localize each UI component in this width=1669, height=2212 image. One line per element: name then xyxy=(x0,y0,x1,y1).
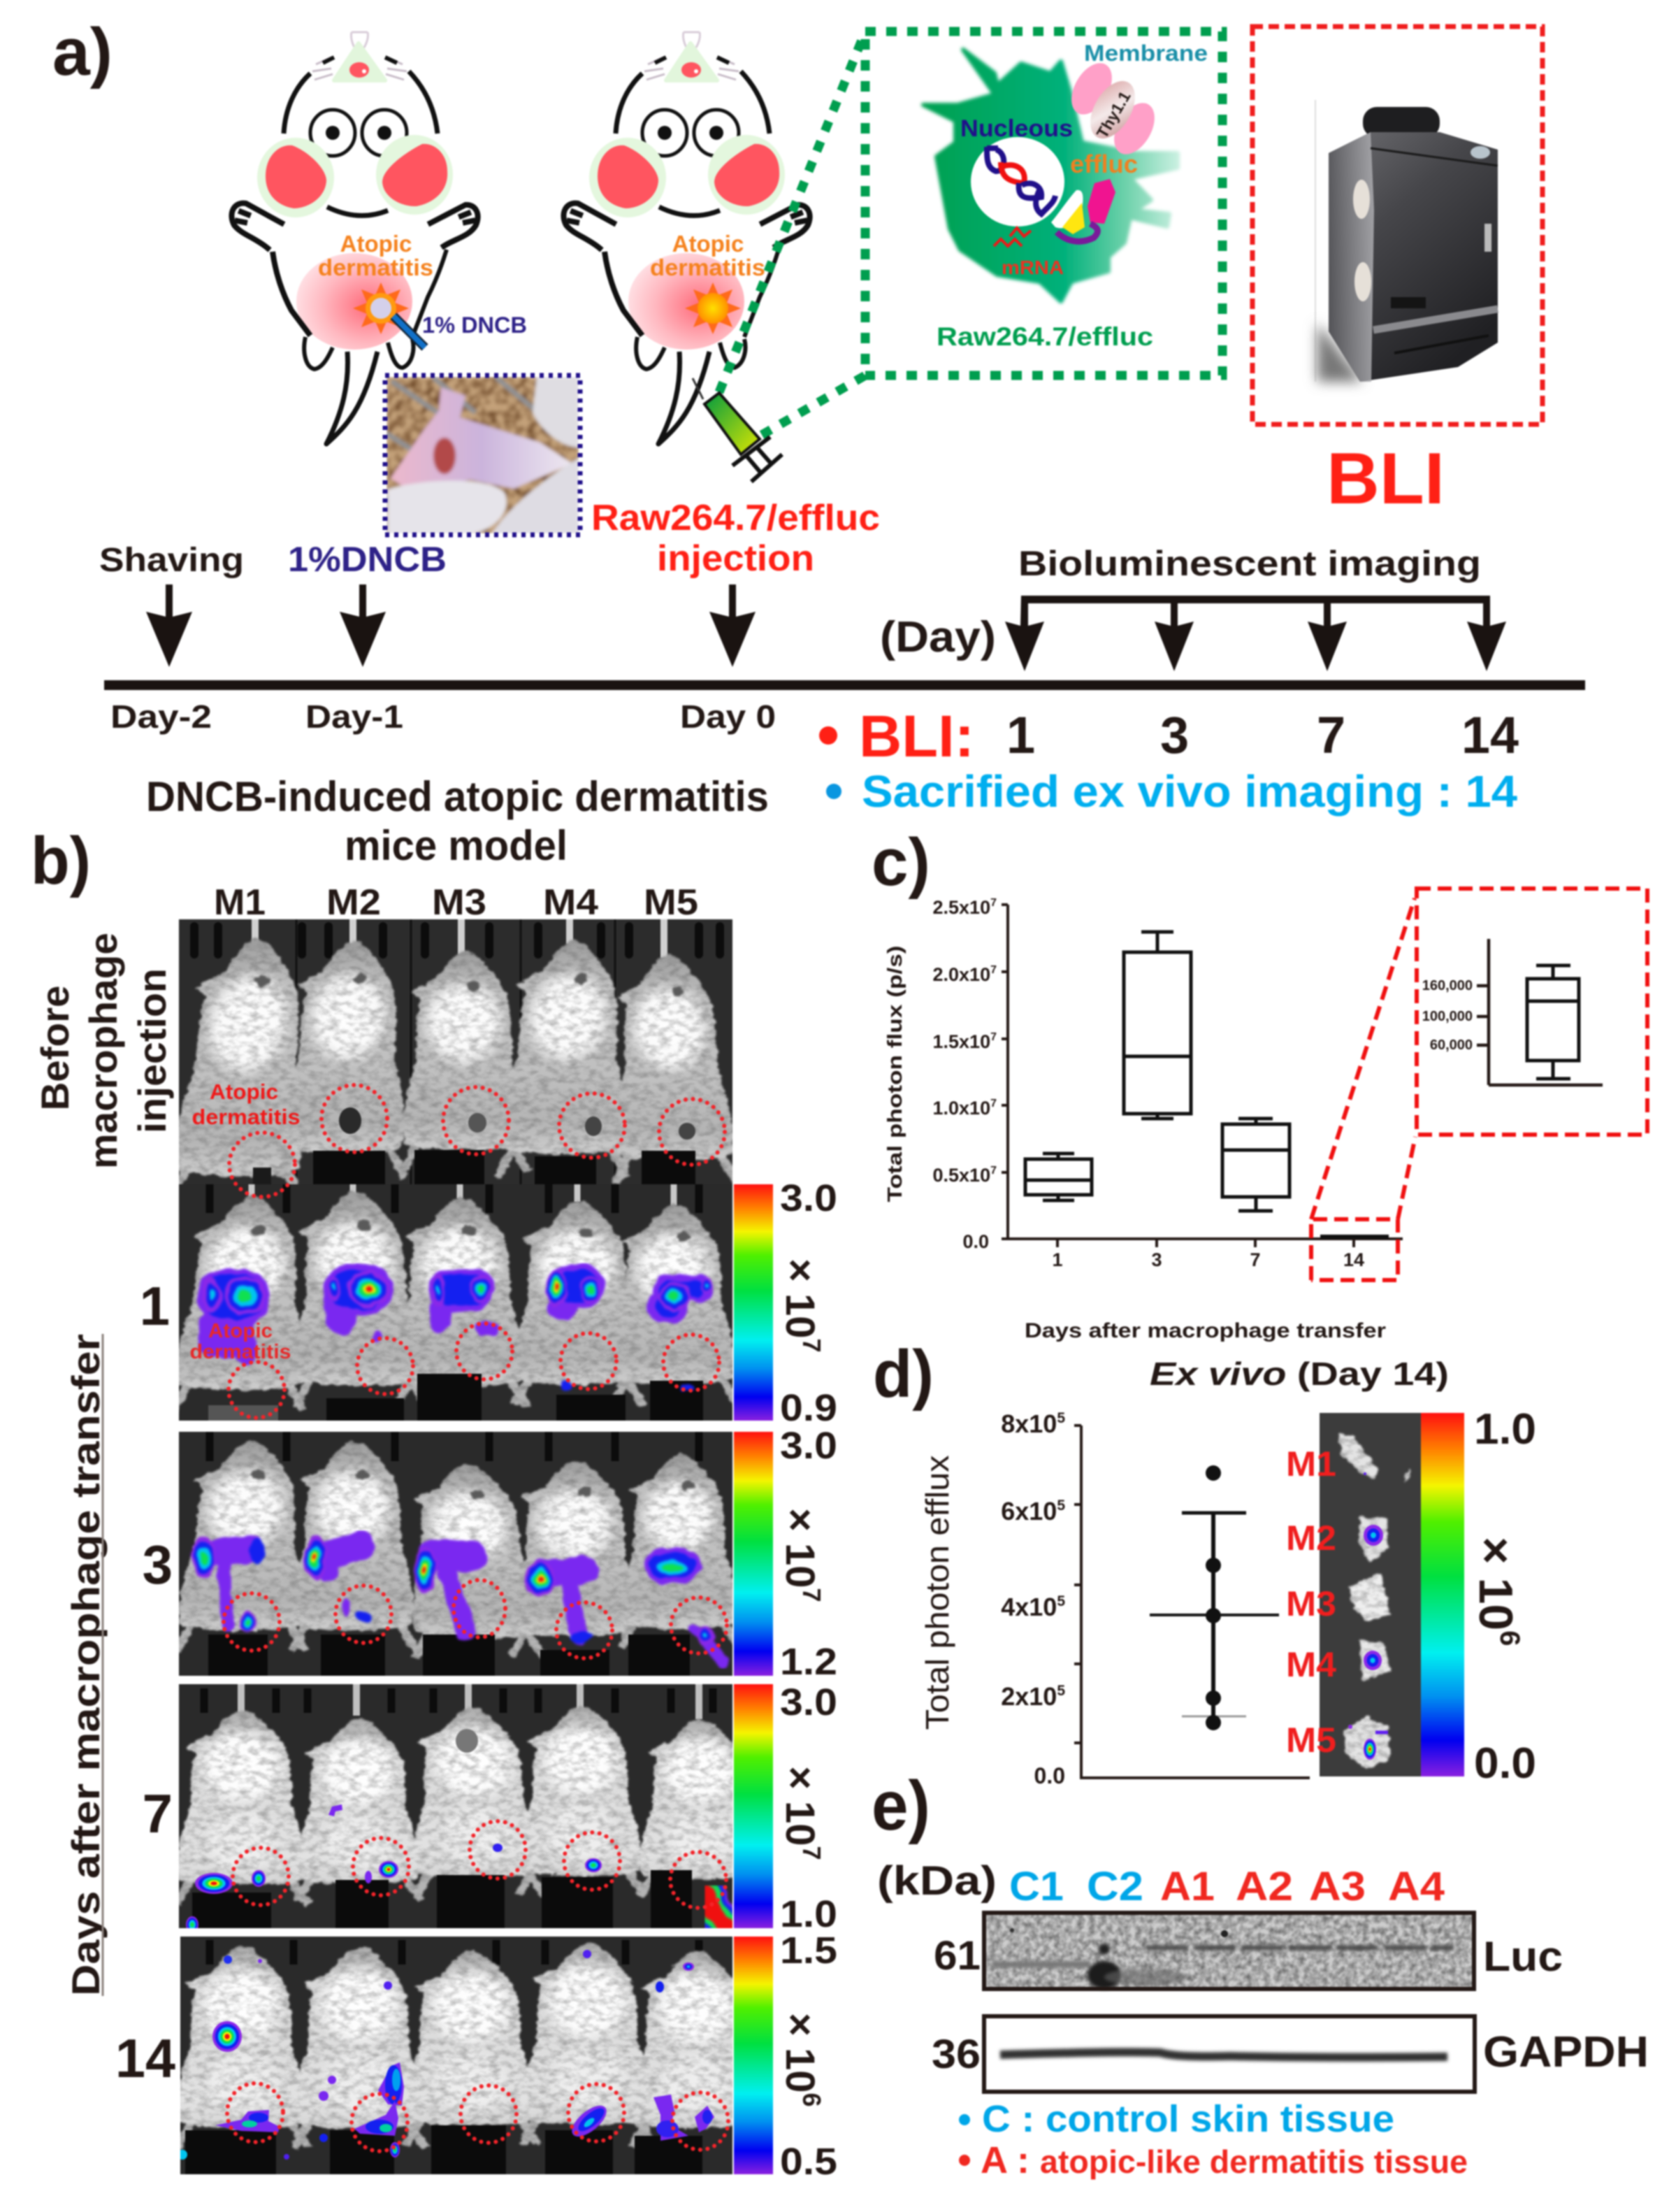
panel: BLI imaging instrument xyxy=(1252,27,1542,424)
y tick labels: 2.5x10 xyxy=(932,897,990,918)
row number labels: 7 xyxy=(143,1783,173,1844)
row label: before macrophage injection xyxy=(33,933,174,1169)
panel label e: e) xyxy=(872,1767,930,1845)
day labels: Day-2 xyxy=(110,698,212,735)
heat signal M5 xyxy=(656,1560,723,1662)
lesion annotations on M1: Atopic xyxy=(208,1320,273,1342)
heat signal M3 xyxy=(431,1274,493,1329)
heat signal M1 xyxy=(178,1955,289,2160)
image row: day 3 xyxy=(176,1432,739,1676)
ex vivo tissue image xyxy=(1320,1413,1421,1776)
row number labels xyxy=(115,1275,175,2089)
inset box plot xyxy=(1422,939,1603,1085)
title second line: mice model xyxy=(345,822,568,869)
lane labels: C2 xyxy=(1087,1864,1143,1909)
legend: atopic: A : xyxy=(981,2139,1029,2181)
cell body xyxy=(923,50,1178,301)
heat signal M2 xyxy=(328,1804,398,1883)
box day 3 xyxy=(1124,932,1191,1119)
BLI schedule: BLI: xyxy=(859,703,974,769)
arrow: shaving xyxy=(146,584,192,667)
colour scale: day 3 xyxy=(734,1425,837,1683)
BLI schedule: 1 xyxy=(1006,706,1035,764)
y tick labels: 1.0x10 xyxy=(932,1098,990,1119)
y tick labels: 5 xyxy=(1057,1498,1065,1514)
unit label: (kDa) xyxy=(877,1858,997,1904)
colour scale: day 1: 7 xyxy=(797,1338,826,1353)
y tick labels: 0.0 xyxy=(1034,1763,1065,1788)
image row: day 14 xyxy=(177,1937,761,2174)
row label: before macrophage injection: Before xyxy=(33,985,77,1111)
box plots xyxy=(1025,932,1389,1237)
colour scale: day 3: 3.0 xyxy=(780,1425,837,1467)
x tick labels: 7 xyxy=(1250,1249,1261,1270)
y tick labels: 2.0x10 xyxy=(932,964,990,985)
colour scale xyxy=(1421,1405,1536,1788)
cartoon mouse with macrophage injection xyxy=(563,32,810,444)
label: shaving: Shaving xyxy=(99,542,244,579)
DNA helix xyxy=(987,147,1055,214)
arrow: day 0 xyxy=(709,584,756,667)
bracket arrows for imaging days xyxy=(1005,596,1506,671)
heat signal M4 xyxy=(585,1858,602,1872)
panel b: in vivo bioluminescence xyxy=(31,773,837,2183)
lesion label second line: dermatitis xyxy=(318,254,433,280)
timeline bar xyxy=(104,680,1585,690)
heat signal M4 xyxy=(567,1950,612,2142)
inset box plot: 60,000 xyxy=(1430,1037,1473,1053)
heat signal M5 xyxy=(659,1278,714,1388)
panel a: experimental scheme xyxy=(52,15,1585,817)
heat signal M1 xyxy=(186,1870,266,1933)
injection label: Raw264.7/effluc xyxy=(591,498,880,538)
injection label xyxy=(591,498,880,579)
timeline xyxy=(99,540,1585,817)
mRNA squiggle xyxy=(994,228,1031,246)
y tick labels: 7 xyxy=(990,1031,997,1043)
arrow: DNCB xyxy=(340,584,386,667)
BLI schedule: 3 xyxy=(1160,706,1189,764)
box day 14 xyxy=(1320,1235,1389,1239)
lesion label: Atopic xyxy=(672,231,744,257)
membrane proteins xyxy=(1063,56,1163,161)
kDa markers: 61 xyxy=(934,1933,981,1978)
heat signal M4 xyxy=(525,1560,593,1643)
axes xyxy=(1074,1425,1310,1778)
colour scale: day 7 xyxy=(734,1681,837,1935)
y tick labels: 0.0 xyxy=(962,1231,989,1252)
cell caption: Raw264.7/effluc xyxy=(937,322,1153,351)
title: DNCB-induced atopic dermatitis xyxy=(146,773,769,820)
colour scale: 0.0 xyxy=(1474,1739,1536,1788)
label: 1% DNCB: 1%DNCB xyxy=(288,540,447,579)
lesion markers: dotted red circles xyxy=(224,1085,728,2151)
injection label: injection xyxy=(657,538,814,579)
M labels xyxy=(1286,1444,1336,1760)
lane labels xyxy=(1009,1864,1445,1909)
panel c: total photon flux box plot xyxy=(872,825,1647,1342)
protein label GAPDH: GAPDH xyxy=(1483,2028,1649,2076)
image row: day 1 xyxy=(172,1184,737,1421)
axis label: days after macrophage transfer: Days after macrophage transfer xyxy=(64,1334,108,1996)
heat signal M1 xyxy=(202,1277,266,1355)
panel e: western blot xyxy=(872,1767,1649,2181)
x tick labels xyxy=(1052,1249,1364,1270)
GAPDH blot xyxy=(984,2016,1475,2092)
lane labels: A1 xyxy=(1160,1864,1215,1909)
heat signal M3 xyxy=(413,1548,472,1632)
y tick labels: 1.5x10 xyxy=(932,1031,990,1052)
colour scale: day 3: 7 xyxy=(797,1588,826,1602)
dot plot xyxy=(1150,1465,1279,1730)
panel label d: d) xyxy=(873,1337,934,1412)
y tick labels: 5 xyxy=(1057,1410,1065,1426)
lane labels: C1 xyxy=(1009,1864,1064,1909)
heat signal M2 xyxy=(303,1537,371,1621)
x tick labels: 3 xyxy=(1151,1249,1162,1270)
y tick labels: 5 xyxy=(1057,1683,1065,1699)
label effluc: effluc xyxy=(1070,150,1138,178)
y tick labels: 5 xyxy=(1057,1593,1065,1609)
row number labels: 1 xyxy=(140,1275,170,1337)
day label: Day-1 xyxy=(305,698,403,735)
panel d: ex vivo xyxy=(873,1337,1536,1788)
row label: before macrophage injection: injection xyxy=(130,968,174,1133)
lesion annotations on M1: dermatitis xyxy=(192,1105,301,1129)
colour scale: day 14: 0.5 xyxy=(780,2141,837,2183)
inset box plot: 160,000 xyxy=(1422,978,1473,993)
colour scale: day 1 xyxy=(734,1177,837,1429)
lane labels: A4 xyxy=(1388,1864,1445,1909)
DNCB label: 1% DNCB xyxy=(422,313,527,338)
y tick labels: 2x10 xyxy=(1001,1682,1057,1711)
effluc protein xyxy=(1051,179,1115,241)
BLI schedule: 7 xyxy=(1317,706,1345,764)
inset box plot: 100,000 xyxy=(1422,1009,1473,1024)
y tick labels: 4x10 xyxy=(1001,1593,1057,1621)
lane labels: A3 xyxy=(1309,1864,1366,1909)
image row: day 7 xyxy=(177,1684,760,1933)
legend: control: C : control skin tissue xyxy=(982,2098,1394,2140)
lesion label: Atopic xyxy=(340,231,412,257)
panel label c: c) xyxy=(872,825,930,900)
Thy1.1 label: Thy1.1 xyxy=(1093,88,1134,141)
cartoon mouse with DNCB application xyxy=(231,32,527,444)
M labels: M3 xyxy=(1286,1584,1336,1623)
y tick labels: 7 xyxy=(990,897,997,909)
heat signal M2 xyxy=(319,1981,404,2157)
BLI schedule: 14 xyxy=(1461,706,1519,764)
legend: atopic: atopic-like dermatitis tissue xyxy=(1040,2143,1468,2180)
M labels: M4 xyxy=(1286,1645,1336,1684)
colour scale: day 14: 6 xyxy=(797,2093,826,2107)
heat signal M2 xyxy=(328,1270,390,1337)
colour scale: day 14 xyxy=(734,1930,837,2183)
x tick labels: 14 xyxy=(1343,1249,1364,1270)
lesion annotations on M1 xyxy=(190,1079,301,1363)
x axis title: Days after macrophage transfer xyxy=(1025,1319,1386,1342)
panel: macrophage cell xyxy=(865,31,1222,375)
y tick labels: 6x10 xyxy=(1001,1497,1057,1525)
label: day axis: (Day) xyxy=(880,613,996,661)
colour scale: 6 xyxy=(1494,1630,1525,1646)
colour scale: day 7: 1.0 xyxy=(780,1893,837,1935)
label: bioluminescent imaging: Bioluminescent imaging xyxy=(1018,544,1481,583)
row label: before macrophage injection: macrophage xyxy=(81,933,125,1169)
M labels: M2 xyxy=(1286,1518,1336,1558)
colour scale: day 3: × 10 xyxy=(777,1508,823,1588)
row number labels: 3 xyxy=(143,1534,173,1595)
label mRNA: mRNA xyxy=(1002,257,1064,278)
mouse column labels: M1 xyxy=(214,882,266,923)
heat signal M5 xyxy=(653,1962,714,2141)
axes xyxy=(1002,905,1403,1247)
lane labels: A2 xyxy=(1236,1864,1293,1909)
panel label b: b) xyxy=(31,824,91,898)
heat signal M3 xyxy=(493,1844,503,1852)
lesion annotations on M1: dermatitis xyxy=(190,1341,291,1363)
label Membrane: Membrane xyxy=(1084,41,1208,66)
colour scale: day 7: 7 xyxy=(797,1846,826,1860)
colour scale: day 7: × 10 xyxy=(777,1766,823,1846)
colour scale: day 14: × 10 xyxy=(777,2013,823,2093)
colour scale: day 3: 1.2 xyxy=(780,1641,837,1683)
M labels: M5 xyxy=(1286,1721,1336,1760)
y axis title: Total photon flux (p/s) xyxy=(884,945,906,1202)
kDa marker 36: 36 xyxy=(932,2032,981,2077)
y tick labels: 7 xyxy=(990,964,997,976)
x tick labels: 1 xyxy=(1052,1249,1063,1270)
mouse column labels: M4 xyxy=(543,882,598,923)
mouse column labels: M5 xyxy=(644,882,698,923)
label Nucleous: Nucleous xyxy=(960,115,1073,142)
lesion label second line: dermatitis xyxy=(650,254,765,280)
colour scale: day 14: 1.5 xyxy=(780,1930,837,1972)
photo of DNCB-treated mouse xyxy=(385,375,580,535)
heading: Ex vivo (Day 14) xyxy=(1150,1356,1449,1392)
y tick labels: 7 xyxy=(990,1165,997,1177)
panel label a: a) xyxy=(52,15,113,89)
lesion annotations on M1: Atopic xyxy=(210,1079,278,1104)
BLI schedule xyxy=(819,703,1519,769)
colour scale: day 1: 3.0 xyxy=(780,1177,837,1219)
day label: Day 0 xyxy=(680,698,776,735)
nucleus xyxy=(971,137,1064,227)
y tick labels: 7 xyxy=(990,1098,997,1109)
ex vivo schedule: Sacrified ex vivo imaging : 14 xyxy=(862,766,1517,817)
mouse column labels: M2 xyxy=(326,882,381,923)
box day 7 xyxy=(1222,1119,1289,1211)
protein label Luc: Luc xyxy=(1483,1933,1563,1980)
y axis title: Total photon efflux xyxy=(919,1456,955,1730)
heat signal M4 xyxy=(546,1269,600,1385)
y tick labels xyxy=(932,897,997,1252)
y tick labels xyxy=(1001,1409,1065,1788)
image row: before injection xyxy=(169,919,737,1202)
row number labels: 14 xyxy=(115,2027,175,2089)
heat signal M5 xyxy=(706,1888,732,1931)
zoom guide lines xyxy=(719,31,865,435)
colour scale: day 7: 3.0 xyxy=(780,1681,837,1723)
icon: syringe xyxy=(693,378,782,482)
colour scale: 1.0 xyxy=(1474,1405,1536,1453)
mouse column labels xyxy=(214,882,698,923)
BLI heading: BLI xyxy=(1327,438,1445,519)
y tick labels: 0.5x10 xyxy=(932,1165,990,1186)
colour scale: day 1: 0.9 xyxy=(780,1387,837,1429)
y tick labels: 8x10 xyxy=(1001,1409,1057,1438)
M labels: M1 xyxy=(1286,1444,1336,1484)
box day 1 xyxy=(1025,1154,1092,1200)
zoom guides and boxes xyxy=(1311,889,1647,1280)
colour scale: × 10 xyxy=(1469,1537,1522,1630)
colour scale: day 1: × 10 xyxy=(777,1258,823,1338)
mouse column labels: M3 xyxy=(432,882,486,923)
Luc blot xyxy=(984,1913,1474,1989)
heat signal M1 xyxy=(192,1537,266,1632)
